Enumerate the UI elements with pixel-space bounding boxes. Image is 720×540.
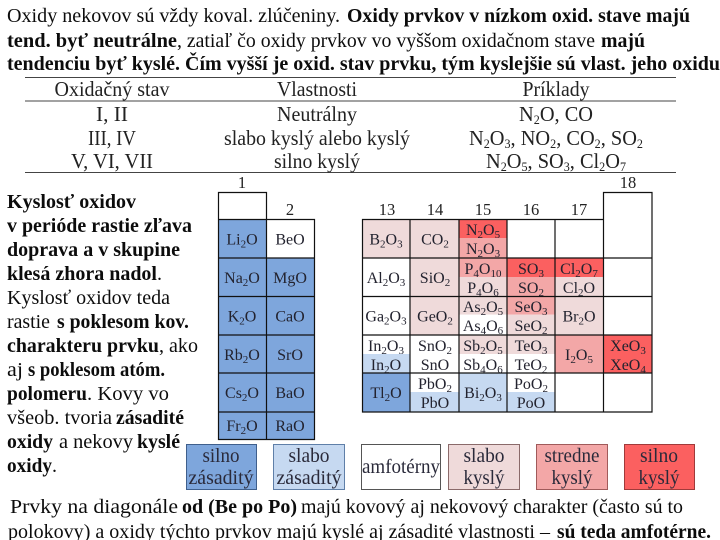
cell: Al2O3: 2: [383, 277, 388, 289]
left explanation text: .: [157, 263, 162, 285]
cell: Rb2O: Rb: [224, 347, 243, 364]
cell: In2O3 In2O: O: [390, 357, 401, 374]
cell: P4O10 P4O6: 10: [490, 268, 502, 280]
table header: Oxidačný stav: [54, 77, 170, 101]
cell: GeO2: 2: [447, 316, 453, 328]
intro text: [7, 5, 720, 75]
cell: N2O5 N2O3: 2: [478, 229, 483, 241]
cell: Ga2O3: [362, 297, 410, 335]
cell: PbO2 PbO: 2: [446, 383, 452, 395]
left explanation text: [7, 191, 198, 477]
cell: PbO2 PbO: PbO: [418, 376, 446, 393]
grid lines: [218, 192, 652, 440]
left explanation text: s poklesom atóm.: [28, 359, 165, 381]
cell: Na2O: O: [248, 270, 260, 287]
cell: Cl2O7 Cl2O: 2: [578, 287, 584, 299]
table row: I, II: N: [519, 104, 534, 126]
cell: Fr2O: Fr: [226, 418, 241, 435]
cell: GeO2: GeO: [417, 308, 447, 326]
cell: Cl2O7 Cl2O: Cl: [563, 280, 578, 297]
cell: GeO2: [410, 297, 459, 335]
legend: stredne kyslý: stredne: [544, 445, 600, 467]
cell: SO3 SO2: 2: [538, 287, 544, 299]
cell: TeO3 TeO2: TeO: [515, 338, 542, 355]
cell: Sb2O5 Sb4O6: O: [486, 338, 497, 355]
legend: silno zásaditý: zásaditý: [188, 467, 254, 489]
left explanation text: zásadité: [116, 407, 184, 429]
cell: Bi2O3: Bi: [464, 385, 479, 402]
left explanation text: v perióde rastie zľava: [7, 215, 192, 237]
cell: Sb2O5 Sb4O6: 2: [480, 345, 486, 357]
group numbers: [238, 173, 636, 219]
legend: stredne kyslý: [536, 444, 608, 490]
table row: V, VI, VII: 7: [620, 160, 626, 174]
oxidation state table: [25, 77, 676, 174]
cell: CO2: 2: [443, 238, 449, 250]
left explanation text: oxidy: [7, 455, 52, 477]
left explanation text: , ako: [159, 335, 198, 357]
cell: Ga2O3: 3: [401, 316, 407, 328]
cell: Bi2O3: 2: [479, 392, 485, 404]
cell: Cl2O7 Cl2O: Cl: [560, 261, 575, 278]
cell: Rb2O: 2: [243, 354, 248, 366]
cell: K2O: 2: [239, 316, 245, 328]
cell: As2O5 As4O6: 5: [498, 306, 504, 318]
cell: CaO: CaO: [275, 308, 305, 326]
cell: Bi2O3: O: [485, 385, 496, 402]
table row: V, VI, VII: 5: [521, 160, 528, 174]
table row: I, II: [96, 102, 593, 127]
cell: N2O5 N2O3: O: [483, 241, 495, 258]
cell: B2O3: 2: [380, 238, 386, 250]
cell: SO3 SO2: SO: [518, 261, 538, 278]
group numbers: 16: [523, 200, 539, 219]
cell: As2O5 As4O6: O: [486, 318, 498, 335]
legend: silno zásaditý: silno: [202, 445, 240, 467]
cell: I2O5: I: [565, 347, 570, 364]
left explanation text: charakteru prvku: [7, 335, 159, 357]
cell: PbO2 PbO: [410, 373, 459, 412]
cell: SnO2 SnO: 2: [446, 345, 452, 357]
table row: III, IV: 2: [484, 137, 490, 151]
cell: Fr2O: [218, 412, 266, 440]
intro text: , zatiaľ čo oxidy prvkov vo vyššom oxidačnom stave: [177, 30, 595, 52]
cell: Al2O3: O: [388, 270, 400, 287]
cell: In2O3 In2O: [362, 335, 410, 376]
table header: Vlastnosti: [277, 77, 357, 101]
cell: BeO: BeO: [275, 232, 305, 248]
left explanation text: kyslé: [137, 431, 180, 453]
cell: N2O5 N2O3: N: [466, 222, 478, 239]
cell: Fr2O: O: [246, 418, 258, 435]
cell: Br2O: O: [584, 308, 596, 326]
cell: I2O5: 2: [570, 354, 576, 366]
table row: V, VI, VII: 2: [501, 160, 507, 174]
cell: Ga2O3: O: [390, 308, 401, 326]
cell: K2O: [218, 297, 266, 335]
table row: III, IV: , NO: [511, 128, 550, 150]
cell: In2O3 In2O: 2: [384, 364, 390, 376]
cell: Sb2O5 Sb4O6: O: [486, 357, 497, 374]
cell: P4O10 P4O6: O: [482, 280, 493, 297]
table row: V, VI, VII: , SO: [528, 151, 564, 173]
cell: Cs2O: 2: [242, 392, 247, 404]
cell: SrO: [266, 335, 314, 373]
table row: III, IV: O: [490, 128, 505, 150]
cell: SO3 SO2: SO: [518, 280, 538, 297]
table row: V, VI, VII: O: [605, 151, 620, 173]
cell: SiO2: [410, 258, 459, 297]
cell: B2O3: O: [386, 232, 397, 248]
cell: Ga2O3: Ga: [365, 308, 384, 326]
cell: Sb2O5 Sb4O6: [459, 335, 507, 376]
cell: N2O5 N2O3: N: [466, 241, 478, 258]
cell: BaO: [266, 373, 314, 412]
cell: B2O3: B: [369, 232, 380, 248]
table row: V, VI, VII: , Cl: [570, 151, 599, 173]
cell: Bi2O3: 3: [496, 392, 502, 404]
cell: TeO3 TeO2: 2: [542, 364, 547, 376]
cell: Sb2O5 Sb4O6: 5: [497, 345, 503, 357]
cell: Br2O: 2: [578, 316, 584, 328]
cell: Li2O: [218, 220, 266, 258]
cell: Al2O3: 3: [400, 277, 406, 289]
cell: As2O5 As4O6: O: [486, 299, 498, 316]
cell: XeO3 XeO4: 4: [640, 364, 646, 376]
left explanation text: .: [52, 455, 57, 477]
cell: TeO3 TeO2: TeO: [515, 357, 542, 374]
cell: N2O5 N2O3: O: [483, 222, 495, 239]
left explanation text: s poklesom kov.: [57, 311, 189, 333]
cell: I2O5: [555, 335, 603, 373]
table row: III, IV: , CO: [556, 128, 595, 150]
cell: XeO3 XeO4: XeO: [610, 338, 640, 355]
cell: SeO3 SeO2: [507, 297, 555, 337]
table row: III, IV: 3: [504, 137, 511, 151]
legend: slabo kyslý: slabo: [464, 445, 504, 467]
group numbers: 13: [379, 200, 395, 219]
intro text: tend. byť neutrálne: [7, 30, 177, 52]
cell: SnO2 SnO: [410, 335, 459, 374]
cell: SeO3 SeO2: 2: [542, 325, 548, 337]
cell: PbO2 PbO: PbO: [421, 395, 449, 412]
legend: slabo kyslý: [448, 444, 520, 490]
table row: III, IV: III, IV: [88, 126, 136, 150]
left explanation text: oxidy: [7, 431, 53, 453]
legend: slabo zásaditý: slabo: [288, 445, 330, 467]
left explanation text: Kyslosť oxidov teda: [7, 287, 170, 309]
cell: Li2O: O: [246, 232, 258, 248]
cell: PoO2 PoO: PoO: [514, 376, 542, 393]
periodic table: groups 13 to 18: [362, 220, 652, 412]
cell: N2O5 N2O3: [459, 220, 507, 260]
table row: V, VI, VII: [71, 149, 626, 174]
cell: In2O3 In2O: 3: [398, 345, 404, 357]
left explanation text: klesá zhora nadol: [7, 263, 157, 285]
left explanation text: Kyslosť oxidov: [7, 191, 136, 213]
legend: slabo zásaditý: zásaditý: [276, 467, 342, 489]
cell: Cl2O7 Cl2O: 7: [592, 268, 598, 280]
cell: Li2O: 2: [241, 238, 246, 250]
cell: Fr2O: 2: [241, 425, 246, 437]
cell: SiO2: 2: [445, 277, 450, 289]
cell: Na2O: [218, 258, 266, 297]
cell: Br2O: Br: [562, 308, 578, 326]
cell: B2O3: 3: [397, 238, 403, 250]
cell: Tl2O: [362, 373, 410, 412]
group numbers: 14: [427, 200, 443, 219]
cell: SnO2 SnO: SnO: [421, 357, 449, 374]
cell: PoO2 PoO: [507, 373, 555, 412]
cell: CO2: CO: [421, 232, 443, 248]
cell: P4O10 P4O6: 6: [493, 287, 499, 299]
cell: Tl2O: O: [390, 385, 402, 402]
group numbers: 2: [286, 200, 294, 219]
cell: Sb2O5 Sb4O6: 4: [480, 364, 486, 376]
intro text: tendenciu byť kyslé. Čím vyšší je oxid. stav prvku, tým kyslejšie sú vlast. jeho oxidu: [7, 51, 720, 75]
table row: V, VI, VII: O: [507, 151, 522, 173]
cell: MgO: [266, 258, 314, 297]
cell: SiO2: SiO: [420, 270, 445, 287]
intro text: Oxidy nekovov sú vždy koval. zlúčeniny.: [7, 5, 340, 27]
bottom text: od (Be po Po): [182, 496, 297, 518]
legend: silno kyslý: [624, 444, 694, 490]
cell: P4O10 P4O6: [459, 258, 507, 299]
cell: Sb2O5 Sb4O6: 6: [497, 364, 503, 376]
cell: SO3 SO2: 3: [538, 268, 544, 280]
table row: III, IV: slabo kyslý alebo kyslý: [224, 126, 410, 150]
cell: Cs2O: O: [247, 385, 259, 402]
cell: SeO3 SeO2: SeO: [514, 299, 542, 316]
cell: In2O3 In2O: 2: [381, 345, 387, 357]
cell: I2O5: 5: [587, 354, 593, 366]
table row: V, VI, VII: silno kyslý: [274, 149, 360, 173]
cell: Li2O: Li: [226, 232, 241, 248]
cell: Ga2O3: 2: [384, 316, 390, 328]
bottom text: [8, 496, 711, 540]
cell: XeO3 XeO4: XeO: [610, 357, 640, 374]
cell: XeO3 XeO4: 3: [640, 345, 646, 357]
cell: SeO3 SeO2: SeO: [514, 318, 542, 335]
left explanation text: doprava a v skupine: [7, 239, 180, 261]
legend: slabo kyslý: kyslý: [464, 467, 504, 489]
cell: RaO: RaO: [275, 418, 305, 435]
group numbers: 17: [571, 200, 587, 219]
table row: V, VI, VII: N: [486, 151, 501, 173]
cell: N2O5 N2O3: 5: [495, 229, 501, 241]
cell: Cs2O: [218, 373, 266, 412]
cell: Br2O: [555, 297, 603, 335]
cell: Sb2O5 Sb4O6: Sb: [463, 357, 480, 374]
cell: Tl2O: Tl: [370, 385, 385, 402]
cell: PoO2 PoO: 2: [542, 383, 548, 395]
cell: Rb2O: O: [248, 347, 260, 364]
cell: MgO: MgO: [273, 270, 307, 287]
table row: I, II: 2: [534, 113, 540, 127]
cell: N2O5 N2O3: 3: [495, 248, 501, 260]
cell: As2O5 As4O6: 6: [498, 325, 504, 337]
cell: SO3 SO2: [507, 258, 555, 299]
cell: Cl2O7 Cl2O: 2: [575, 268, 581, 280]
legend: silno zásaditý: [186, 444, 256, 490]
cell: Na2O: Na: [224, 270, 243, 287]
cell: As2O5 As4O6: [459, 297, 507, 337]
cell: As2O5 As4O6: As: [463, 299, 481, 316]
table row: III, IV: [88, 126, 643, 151]
table row: III, IV: 2: [550, 137, 556, 151]
cell: TeO3 TeO2: 3: [542, 345, 548, 357]
cell: Bi2O3: [459, 373, 507, 412]
legend: amfotérny: amfotérny: [362, 456, 440, 478]
cell: SnO2 SnO: SnO: [418, 338, 446, 355]
group numbers: 1: [238, 173, 246, 192]
cell: Tl2O: 2: [385, 392, 390, 404]
bottom text: majú kovový aj nekovový charakter (často sú to: [301, 496, 683, 518]
table row: I, II: I, II: [96, 102, 128, 126]
cell: B2O3: [362, 220, 410, 258]
cell: Al2O3: [362, 258, 410, 297]
cell: Na2O: 2: [243, 277, 248, 289]
cell: PoO2 PoO: PoO: [517, 395, 545, 412]
cell: In2O3 In2O: In: [368, 338, 381, 355]
table row: I, II: Neutrálny: [277, 102, 357, 126]
cell: Al2O3: Al: [367, 270, 383, 287]
cell: P4O10 P4O6: P: [465, 261, 473, 278]
cell: CaO: [266, 297, 314, 335]
cell: P4O10 P4O6: 4: [473, 268, 479, 280]
cell: TeO3 TeO2: [507, 335, 555, 376]
legend: silno kyslý: silno: [640, 445, 678, 467]
cell: As2O5 As4O6: 2: [481, 306, 486, 318]
left explanation text: aj: [7, 359, 23, 381]
cell: Cl2O7 Cl2O: O: [581, 261, 592, 278]
cell: Cl2O7 Cl2O: [555, 258, 603, 299]
table row: V, VI, VII: V, VI, VII: [71, 149, 153, 173]
left explanation text: a nekovy: [59, 431, 133, 453]
cell: In2O3 In2O: O: [387, 338, 398, 355]
cell: XeO3 XeO4: [603, 335, 652, 376]
group numbers: 15: [475, 200, 491, 219]
left explanation text: rastie: [7, 311, 50, 333]
legend: silno kyslý: kyslý: [638, 467, 680, 489]
table header: [54, 77, 590, 101]
left explanation text: polomeru: [7, 383, 87, 405]
table row: V, VI, VII: 3: [564, 160, 570, 174]
bottom text: Prvky na diagonále: [10, 496, 178, 518]
cell: As2O5 As4O6: 4: [481, 325, 487, 337]
cell: SrO: SrO: [277, 347, 303, 364]
cell: N2O5 N2O3: 2: [478, 248, 483, 260]
cell: In2O3 In2O: In: [371, 357, 384, 374]
legend: stredne kyslý: kyslý: [552, 467, 592, 489]
cell: Sb2O5 Sb4O6: Sb: [463, 338, 480, 355]
group numbers: 18: [620, 173, 636, 192]
cell: CO2: [410, 220, 459, 258]
cell: Cs2O: Cs: [225, 385, 242, 402]
intro text: Oxidy prvkov v nízkom oxid. stave majú: [347, 5, 690, 27]
cell: RaO: [266, 412, 314, 440]
cell: BaO: BaO: [275, 385, 305, 402]
left explanation text: všeob. tvoria: [7, 407, 112, 429]
legend: [186, 444, 694, 490]
cell: P4O10 P4O6: 4: [476, 287, 482, 299]
cell: As2O5 As4O6: As: [463, 318, 481, 335]
cell: P4O10 P4O6: P: [467, 280, 476, 297]
intro text: majú: [601, 30, 645, 52]
cell: P4O10 P4O6: O: [479, 261, 490, 278]
cell: SeO3 SeO2: 3: [542, 306, 548, 318]
table row: III, IV: , SO: [601, 128, 637, 150]
table header: Príklady: [522, 77, 590, 101]
periodic table: groups 1 and 2: [218, 220, 314, 440]
legend: amfotérny: [362, 444, 440, 490]
cell: K2O: O: [245, 308, 256, 326]
cell: K2O: K: [228, 308, 239, 326]
table row: III, IV: N: [469, 128, 484, 150]
cell: Rb2O: [218, 335, 266, 373]
cell: BeO: [266, 220, 314, 258]
table row: III, IV: 2: [637, 137, 643, 151]
table row: V, VI, VII: 2: [599, 160, 605, 174]
cell: I2O5: O: [576, 347, 587, 364]
cell: Cl2O7 Cl2O: O: [584, 280, 595, 297]
table row: I, II: O, CO: [540, 104, 593, 126]
left explanation text: . Kovy vo: [87, 383, 169, 405]
table row: III, IV: 2: [595, 137, 601, 151]
legend: slabo zásaditý: [274, 444, 344, 490]
